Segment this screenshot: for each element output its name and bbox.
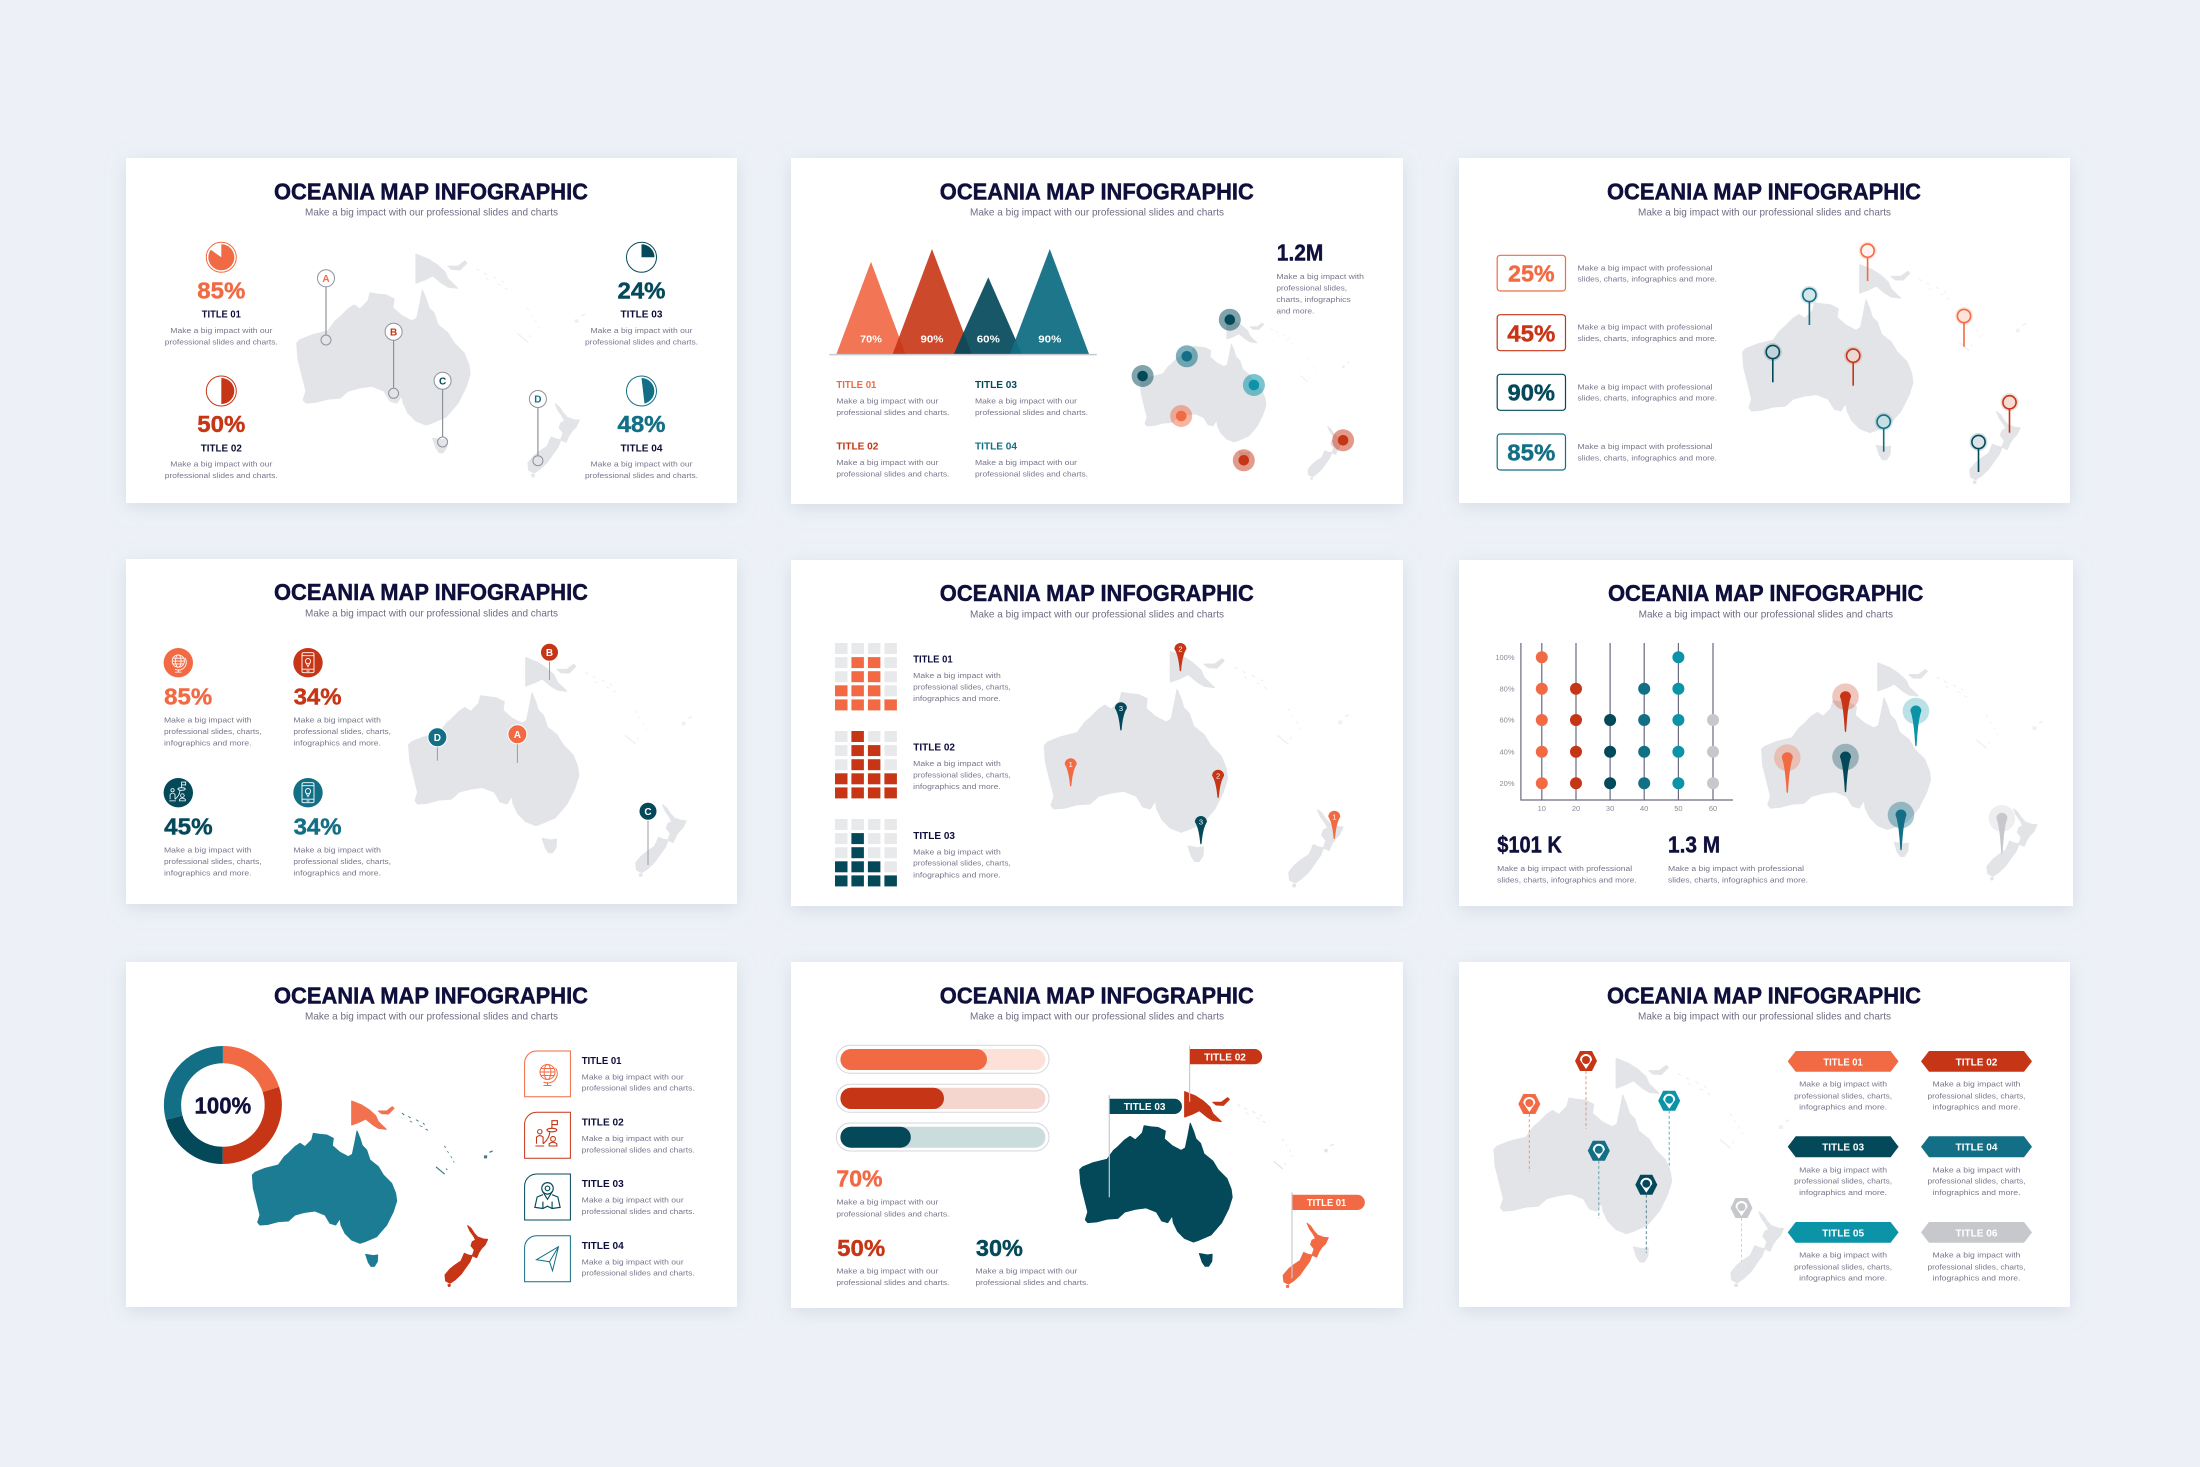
stat: 34% red: Make a big impact with bbox=[293, 715, 381, 724]
icon: phone badge teal bbox=[293, 778, 323, 807]
stat: 85%: Make a big impact with bbox=[164, 715, 252, 724]
icon: phone badge red bbox=[293, 648, 323, 677]
slide 6 title: OCEANIA MAP INFOGRAPHIC bbox=[1608, 580, 1923, 606]
text: title 03 bbox=[582, 1178, 695, 1216]
stat: 70%: Make a big impact with our bbox=[836, 1198, 939, 1207]
stat: 50% title 02 bbox=[165, 411, 278, 480]
text: title 01 bbox=[913, 654, 1011, 703]
text: title 03: TITLE 03 bbox=[913, 830, 955, 842]
icon box: map pin bbox=[525, 1174, 570, 1220]
text: title 04 bbox=[975, 441, 1088, 479]
marker D: D bbox=[534, 395, 542, 406]
text: title 04: TITLE 04 bbox=[582, 1240, 624, 1252]
text: title 03: Make a big impact with bbox=[913, 847, 1001, 856]
text: title 05 description bbox=[1794, 1251, 1892, 1283]
marker D bbox=[529, 390, 546, 466]
slide 9 subtitle: Make a big impact with our professional slides and charts bbox=[1638, 1011, 1891, 1023]
dot matrix chart: 30 bbox=[1606, 804, 1614, 813]
marker C bbox=[434, 372, 451, 447]
stat: 30% bbox=[976, 1235, 1088, 1287]
dot matrix chart: 40 bbox=[1640, 804, 1648, 813]
text: title 01: Make a big impact with our bbox=[836, 396, 939, 405]
slide 3 map bbox=[1743, 265, 2026, 483]
stat: 50%: Make a big impact with our bbox=[836, 1267, 939, 1276]
stat: 48% title 04: professional slides and charts. bbox=[585, 471, 698, 480]
triangle chart: 90% bbox=[920, 335, 944, 346]
text: 45% description: Make a big impact with professional bbox=[1578, 323, 1713, 332]
text: 25% description: slides, charts, infographics and more. bbox=[1578, 275, 1717, 284]
text: title 03: TITLE 03 bbox=[582, 1178, 624, 1190]
text: title 01 bbox=[836, 379, 949, 417]
text: title 01: Make a big impact with our bbox=[582, 1072, 684, 1081]
text: title 04: professional slides and charts. bbox=[582, 1269, 695, 1278]
slide 5 subtitle: Make a big impact with our professional slides and charts bbox=[970, 609, 1224, 621]
text: title 06 description: infographics and more. bbox=[1932, 1274, 2020, 1283]
slide 3 subtitle: Make a big impact with our professional slides and charts bbox=[1638, 206, 1891, 218]
stat: 1.2M bbox=[1276, 240, 1364, 316]
stat: 24% title 03: Make a big impact with our bbox=[590, 326, 693, 335]
stat: 34% red: 34% bbox=[294, 683, 342, 709]
banner: title 03 bbox=[1788, 1136, 1899, 1157]
text: title 04: Make a big impact with our bbox=[975, 458, 1077, 467]
text: title 04 bbox=[582, 1240, 695, 1278]
text: title 02: professional slides, charts, bbox=[913, 771, 1011, 780]
coloured map bbox=[1080, 1092, 1334, 1287]
stat: 48% title 04: 48% bbox=[618, 411, 666, 437]
stat: 1.2M: 1.2M bbox=[1277, 240, 1323, 266]
stat: $101 K: $101 K bbox=[1497, 831, 1562, 857]
dot matrix chart bbox=[1495, 643, 1733, 813]
banner: title 05 bbox=[1788, 1222, 1899, 1243]
pin D bbox=[428, 728, 447, 761]
icon: 85% pie bbox=[206, 242, 236, 272]
stat: 48% title 04: Make a big impact with our bbox=[590, 460, 693, 469]
text: title 05 description: Make a big impact with bbox=[1799, 1251, 1887, 1260]
stat: 70%: 70% bbox=[836, 1166, 883, 1192]
numbered map pins: 3 bbox=[1199, 818, 1203, 827]
text: title 03 description bbox=[1794, 1165, 1892, 1197]
panel: slide 9, hexagon pins and banners bbox=[1459, 962, 2070, 1307]
flag: title 01: TITLE 01 bbox=[1307, 1198, 1347, 1209]
text: title 01: professional slides and charts. bbox=[582, 1084, 695, 1093]
text: title 01: professional slides and charts. bbox=[836, 408, 949, 417]
banner: title 02 bbox=[1921, 1051, 2032, 1072]
stat: 34% teal bbox=[293, 813, 391, 877]
banner: title 06 bbox=[1921, 1222, 2032, 1243]
text: title 04 description bbox=[1928, 1165, 2026, 1197]
dot matrix chart: 20% bbox=[1499, 779, 1515, 788]
text: title 02 description: professional slides, charts, bbox=[1928, 1091, 2026, 1100]
progress bar red bbox=[836, 1084, 1049, 1112]
progress bar orange bbox=[836, 1045, 1049, 1073]
slide 4 map bbox=[409, 658, 692, 876]
pin B: B bbox=[546, 648, 553, 659]
slide 5 title: OCEANIA MAP INFOGRAPHIC bbox=[940, 580, 1254, 606]
text: 90% description bbox=[1578, 382, 1717, 403]
marker B: B bbox=[390, 327, 397, 338]
icon box: people and flag bbox=[525, 1112, 570, 1158]
dot matrix chart: 100% bbox=[1495, 653, 1515, 662]
numbered map pins: 2 bbox=[1216, 771, 1220, 780]
panel: slide 2, triangle chart and dot map bbox=[791, 158, 1403, 504]
box: 85%: 85% bbox=[1507, 439, 1555, 465]
box: 25%: 25% bbox=[1508, 261, 1555, 287]
triangle chart: 60% bbox=[977, 335, 1000, 346]
banner: title 06: TITLE 06 bbox=[1956, 1228, 1998, 1239]
stat: 85% title 01: TITLE 01 bbox=[202, 309, 241, 321]
dot matrix chart: 60% bbox=[1499, 716, 1515, 725]
text: title 03 bbox=[975, 379, 1088, 417]
stat: 50% title 02: TITLE 02 bbox=[201, 442, 242, 454]
stat: 1.3 M bbox=[1668, 831, 1808, 885]
stat: $101 K: Make a big impact with professional bbox=[1497, 864, 1633, 873]
numbered map pins: 1 bbox=[1332, 812, 1336, 821]
text: 45% description bbox=[1578, 323, 1717, 343]
text: title 02: TITLE 02 bbox=[836, 441, 879, 453]
stat: 50% bbox=[836, 1235, 949, 1287]
pin A: A bbox=[514, 730, 521, 741]
stat: 34% teal: infographics and more. bbox=[293, 868, 381, 877]
stat: 85%: 85% bbox=[164, 683, 212, 709]
box: 90%: 90% bbox=[1508, 380, 1555, 406]
triangle chart: 90% bbox=[1038, 335, 1061, 346]
text: title 02 description bbox=[1928, 1080, 2026, 1112]
text: title 01 bbox=[582, 1055, 695, 1093]
flag: title 02: TITLE 02 bbox=[1204, 1052, 1246, 1063]
text: title 03: professional slides, charts, bbox=[913, 859, 1011, 868]
stat: 1.2M: professional slides, bbox=[1276, 284, 1347, 293]
numbered map pins bbox=[1065, 643, 1340, 844]
stat: 85% title 01: 85% bbox=[197, 277, 245, 303]
text: title 01 description bbox=[1794, 1080, 1892, 1112]
text: title 03 bbox=[913, 830, 1011, 879]
text: title 04 description: Make a big impact with bbox=[1932, 1165, 2020, 1174]
slide 1 title: OCEANIA MAP INFOGRAPHIC bbox=[274, 178, 588, 204]
slide 1 subtitle: Make a big impact with our professional slides and charts bbox=[305, 206, 558, 218]
icon: 50% pie bbox=[206, 376, 236, 406]
stat: $101 K bbox=[1497, 831, 1637, 885]
text: title 03: Make a big impact with our bbox=[975, 396, 1077, 405]
text: 90% description: Make a big impact with professional bbox=[1578, 382, 1713, 391]
box: 85% bbox=[1497, 434, 1566, 470]
stat: 45%: professional slides, charts, bbox=[164, 857, 262, 866]
text: title 01 description: professional slides, charts, bbox=[1794, 1091, 1892, 1100]
stat: 34% teal: professional slides, charts, bbox=[293, 857, 391, 866]
stat: 34% red: infographics and more. bbox=[293, 738, 381, 747]
text: title 04: Make a big impact with our bbox=[582, 1257, 684, 1266]
stat: 45% bbox=[164, 813, 262, 877]
stat: 30%: 30% bbox=[976, 1235, 1023, 1261]
dot matrix chart: 40% bbox=[1499, 747, 1515, 756]
stat: 50%: 50% bbox=[837, 1235, 885, 1261]
coloured map bbox=[252, 1101, 493, 1286]
box: 45%: 45% bbox=[1507, 320, 1555, 346]
donut chart 100% bbox=[172, 1055, 273, 1155]
dot matrix chart: 10 bbox=[1538, 804, 1546, 813]
icon: globe badge bbox=[164, 648, 193, 677]
stat: 30%: Make a big impact with our bbox=[976, 1267, 1078, 1276]
icon box: globe bbox=[525, 1051, 570, 1097]
text: 45% description: slides, charts, infographics and more. bbox=[1578, 334, 1717, 343]
stat: 34% teal: Make a big impact with bbox=[293, 845, 381, 854]
text: title 01: Make a big impact with bbox=[913, 671, 1001, 680]
slide 8 title: OCEANIA MAP INFOGRAPHIC bbox=[940, 982, 1254, 1008]
stat: 70% bbox=[836, 1166, 949, 1218]
slide 2 subtitle: Make a big impact with our professional slides and charts bbox=[970, 206, 1224, 218]
slide 1 map bbox=[297, 254, 586, 477]
banner: title 01 bbox=[1788, 1051, 1899, 1072]
pin C: C bbox=[644, 807, 652, 818]
text: title 05 description: professional slides, charts, bbox=[1794, 1262, 1892, 1271]
banner: title 01: TITLE 01 bbox=[1823, 1057, 1863, 1068]
flag: title 02 bbox=[1190, 1046, 1262, 1102]
banner: title 04 bbox=[1921, 1136, 2032, 1157]
text: title 02 bbox=[913, 742, 1011, 791]
text: title 02 description: infographics and more. bbox=[1932, 1103, 2020, 1112]
slide 9 map bbox=[1494, 1058, 1790, 1286]
text: title 02: Make a big impact with our bbox=[582, 1134, 684, 1143]
stat: 85% title 01 bbox=[165, 277, 278, 346]
text: title 02: Make a big impact with our bbox=[836, 458, 939, 467]
banner: title 05: TITLE 05 bbox=[1822, 1228, 1865, 1239]
text: 85% description bbox=[1578, 442, 1717, 462]
pin D: D bbox=[434, 733, 441, 744]
panel: slide 6, dot matrix chart and halo pins bbox=[1459, 560, 2073, 906]
slide 3 title: OCEANIA MAP INFOGRAPHIC bbox=[1607, 178, 1921, 204]
banner: title 02: TITLE 02 bbox=[1956, 1057, 1998, 1068]
slide 5 map bbox=[1044, 652, 1350, 887]
text: title 03 description: Make a big impact with bbox=[1799, 1165, 1887, 1174]
text: title 04: TITLE 04 bbox=[975, 441, 1017, 453]
banner: title 03: TITLE 03 bbox=[1822, 1143, 1865, 1154]
dot matrix chart: 20 bbox=[1572, 804, 1580, 813]
halo map pins bbox=[1774, 683, 2015, 854]
slide 2 map bbox=[1140, 318, 1350, 479]
text: title 02: infographics and more. bbox=[913, 782, 1001, 791]
text: title 03 description: infographics and more. bbox=[1799, 1188, 1887, 1197]
panel: slide 1, pie stats with lettered map markers bbox=[126, 158, 737, 503]
marker A: A bbox=[322, 274, 330, 285]
text: title 06 description: Make a big impact with bbox=[1932, 1251, 2020, 1260]
text: title 01: infographics and more. bbox=[913, 694, 1001, 703]
slide 8 subtitle: Make a big impact with our professional slides and charts bbox=[970, 1011, 1224, 1023]
stat: 24% title 03: TITLE 03 bbox=[620, 309, 663, 321]
slide 4 subtitle: Make a big impact with our professional slides and charts bbox=[305, 608, 558, 620]
panel: slide 3, percentage boxes and pins bbox=[1459, 158, 2070, 503]
box: 90% bbox=[1497, 374, 1566, 410]
stat: 1.2M: and more. bbox=[1276, 307, 1314, 316]
stat: 24% title 03: professional slides and charts. bbox=[585, 337, 698, 346]
text: title 02: Make a big impact with bbox=[913, 759, 1001, 768]
text: title 02 bbox=[582, 1117, 695, 1154]
dot matrix chart: 60 bbox=[1709, 804, 1717, 813]
text: title 02 bbox=[836, 441, 949, 479]
text: title 03: professional slides and charts. bbox=[975, 408, 1088, 417]
slide 2 title: OCEANIA MAP INFOGRAPHIC bbox=[940, 178, 1254, 204]
panel: slide 7, donut and coloured map bbox=[126, 962, 737, 1307]
text: title 02: TITLE 02 bbox=[582, 1117, 624, 1129]
text: title 01: professional slides, charts, bbox=[913, 683, 1011, 692]
stat: 34% red: professional slides, charts, bbox=[293, 727, 391, 736]
text: title 02: professional slides and charts. bbox=[582, 1145, 695, 1154]
stat: 85%: infographics and more. bbox=[164, 738, 252, 747]
text: title 04 description: professional slides, charts, bbox=[1928, 1177, 2026, 1186]
stat: 45%: infographics and more. bbox=[164, 868, 252, 877]
stat: $101 K: slides, charts, infographics and more. bbox=[1497, 876, 1637, 885]
text: 25% description bbox=[1578, 263, 1717, 284]
text: 25% description: Make a big impact with professional bbox=[1578, 263, 1713, 272]
slide 7 subtitle: Make a big impact with our professional slides and charts bbox=[305, 1011, 558, 1023]
pin B bbox=[540, 643, 558, 680]
banner: title 04: TITLE 04 bbox=[1956, 1143, 1998, 1154]
stat: 85% title 01: Make a big impact with our bbox=[170, 326, 273, 335]
panel: slide 4, icon stats and letter pins bbox=[126, 559, 737, 904]
stat: 85% title 01: professional slides and charts. bbox=[165, 337, 278, 346]
stat: 1.3 M: slides, charts, infographics and more. bbox=[1668, 876, 1808, 885]
stat: 45%: 45% bbox=[164, 813, 213, 839]
text: title 06 description bbox=[1928, 1251, 2026, 1283]
slide 9 title: OCEANIA MAP INFOGRAPHIC bbox=[1607, 982, 1921, 1008]
triangle chart bbox=[829, 249, 1097, 355]
stat: 50% title 02: Make a big impact with our bbox=[170, 460, 273, 469]
icon: 48% pie bbox=[626, 376, 656, 406]
slide 6 subtitle: Make a big impact with our professional slides and charts bbox=[1639, 609, 1893, 621]
waffle chart 1 bbox=[835, 643, 897, 710]
stat: 48% title 04 bbox=[585, 411, 698, 480]
stat: 50% title 02: 50% bbox=[197, 411, 245, 437]
stat: 34% red bbox=[293, 683, 391, 747]
stat: 50% title 02: professional slides and charts. bbox=[165, 471, 278, 480]
progress bar dark bbox=[836, 1123, 1049, 1151]
stat: 70%: professional slides and charts. bbox=[836, 1209, 949, 1218]
triangle chart: 70% bbox=[860, 335, 882, 346]
box: 25% bbox=[1497, 255, 1566, 291]
text: title 01 description: infographics and more. bbox=[1799, 1103, 1887, 1112]
stat: 85% bbox=[164, 683, 262, 747]
numbered map pins: 3 bbox=[1119, 704, 1123, 713]
dot matrix chart: 80% bbox=[1499, 684, 1515, 693]
waffle chart 3 bbox=[835, 819, 897, 886]
numbered map pins: 2 bbox=[1178, 645, 1182, 654]
map pins bbox=[1764, 242, 2018, 472]
box: 45% bbox=[1497, 315, 1566, 351]
text: title 03 description: professional slides, charts, bbox=[1794, 1177, 1892, 1186]
hexagon pins with dashed leaders bbox=[1518, 1051, 1752, 1262]
panel: slide 8, progress bars and flags bbox=[791, 962, 1403, 1308]
marker A bbox=[318, 270, 334, 345]
text: 90% description: slides, charts, infographics and more. bbox=[1578, 394, 1717, 403]
text: title 04 description: infographics and more. bbox=[1932, 1188, 2020, 1197]
icon box: paper plane bbox=[525, 1236, 570, 1282]
flag: title 01 bbox=[1292, 1192, 1365, 1278]
stat: 1.2M: Make a big impact with bbox=[1276, 272, 1364, 281]
text: title 03: Make a big impact with our bbox=[582, 1196, 684, 1205]
text: title 02 description: Make a big impact with bbox=[1932, 1080, 2020, 1089]
text: title 05 description: infographics and more. bbox=[1799, 1274, 1887, 1283]
text: title 02: professional slides and charts. bbox=[836, 470, 949, 479]
text: title 01: TITLE 01 bbox=[836, 379, 877, 391]
flag: title 03 bbox=[1109, 1095, 1182, 1197]
stat: 48% title 04: TITLE 04 bbox=[620, 442, 663, 454]
panel: slide 5, waffle charts and numbered pins bbox=[791, 560, 1403, 906]
text: title 01: TITLE 01 bbox=[582, 1055, 622, 1067]
numbered map pins: 1 bbox=[1069, 760, 1073, 769]
text: title 01 description: Make a big impact with bbox=[1799, 1080, 1887, 1089]
slide 7 title: OCEANIA MAP INFOGRAPHIC bbox=[274, 982, 588, 1008]
text: title 01: TITLE 01 bbox=[913, 654, 953, 666]
text: title 03: infographics and more. bbox=[913, 870, 1001, 879]
pin C bbox=[639, 802, 657, 865]
dot matrix chart: 50 bbox=[1674, 804, 1683, 813]
text: title 04: professional slides and charts. bbox=[975, 470, 1088, 479]
map dots bbox=[1132, 309, 1354, 471]
stat: 1.3 M: Make a big impact with professional bbox=[1668, 864, 1804, 873]
text: 85% description: slides, charts, infographics and more. bbox=[1578, 453, 1717, 462]
icon: people badge bbox=[164, 778, 193, 807]
stat: 24% title 03: 24% bbox=[618, 277, 666, 303]
marker B bbox=[385, 323, 402, 398]
text: title 02: TITLE 02 bbox=[913, 742, 955, 754]
donut chart 100%: 100% bbox=[195, 1092, 251, 1118]
text: title 06 description: professional slides, charts, bbox=[1928, 1262, 2026, 1271]
text: title 03: professional slides and charts. bbox=[582, 1207, 695, 1216]
waffle chart 2 bbox=[835, 731, 897, 798]
text: title 03: TITLE 03 bbox=[975, 379, 1017, 391]
flag: title 03: TITLE 03 bbox=[1124, 1102, 1166, 1113]
stat: 50%: professional slides and charts. bbox=[836, 1278, 949, 1287]
stat: 1.2M: charts, infographics bbox=[1276, 295, 1351, 304]
text: 85% description: Make a big impact with professional bbox=[1578, 442, 1713, 451]
stat: 1.3 M: 1.3 M bbox=[1668, 831, 1720, 857]
slide 6 map bbox=[1762, 663, 2043, 880]
stat: 45%: Make a big impact with bbox=[164, 845, 252, 854]
stat: 85%: professional slides, charts, bbox=[164, 727, 262, 736]
stat: 30%: professional slides and charts. bbox=[976, 1278, 1088, 1287]
marker C: C bbox=[439, 376, 446, 387]
slide 4 title: OCEANIA MAP INFOGRAPHIC bbox=[274, 579, 588, 605]
pin A bbox=[508, 725, 527, 763]
stat: 24% title 03 bbox=[585, 277, 698, 346]
icon: 24% pie bbox=[626, 242, 656, 272]
stat: 34% teal: 34% bbox=[294, 813, 342, 839]
